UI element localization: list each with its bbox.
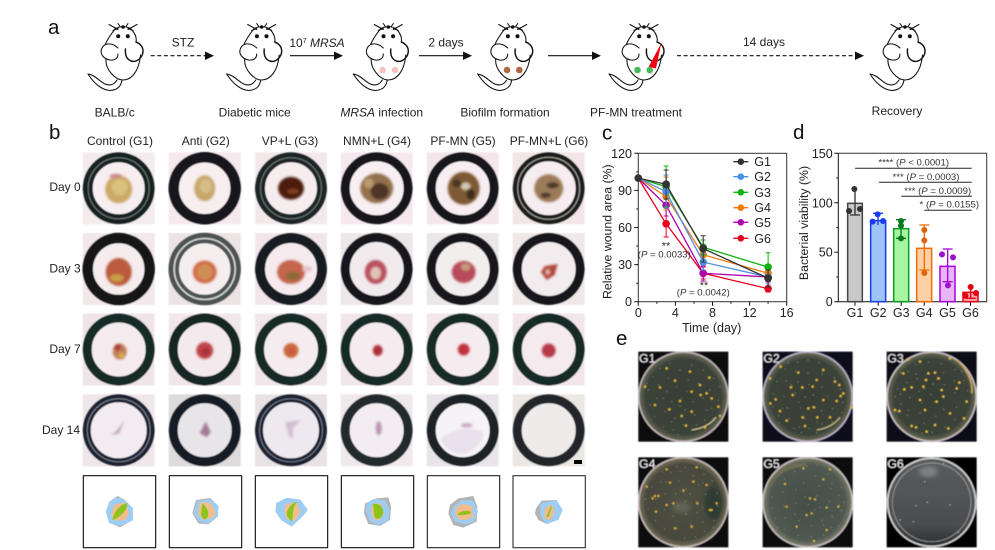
y axis tick labels: 90 [618, 184, 632, 198]
wound map G1 [83, 476, 156, 548]
panel e: bacterial culture plates [616, 327, 979, 550]
legend: G1 [754, 155, 771, 169]
plate G6 [887, 457, 977, 547]
x axis tick labels [635, 306, 794, 320]
plate G2: G2 [763, 351, 780, 365]
x axis tick labels: 0 [635, 306, 642, 320]
column title G4: NMN+L (G4) [343, 134, 411, 148]
y axis tick labels: 150 [812, 147, 833, 161]
arrow: to treatment [548, 52, 601, 60]
series G4 [638, 177, 771, 280]
x axis tick labels: G4 [916, 306, 933, 320]
significance note at day 7: (P = 0.0042) [677, 288, 730, 298]
y axis title: Relative wound area (%) [600, 164, 614, 299]
significance bracket G2 vs G6: *** (P = 0.0003) [893, 172, 959, 183]
photo: G5 day 0 [427, 152, 499, 224]
photo: G1 day 3 [83, 233, 155, 305]
wound map G4 [341, 476, 414, 548]
legend [733, 155, 771, 246]
bar G2 [870, 211, 886, 302]
photo: G5 day 7 [427, 314, 499, 386]
column title G2: Anti (G2) [182, 134, 230, 148]
bar G5 [939, 249, 956, 302]
series G1 [635, 170, 771, 287]
panel b: wound photographs [42, 121, 588, 548]
step label: diabetic mice: Diabetic mice [219, 106, 291, 120]
row label day 0: Day 0 [49, 180, 81, 194]
step label: biofilm formation: Biofilm formation [460, 106, 550, 120]
wound map G5 [427, 476, 500, 548]
y axis tick labels: 60 [618, 221, 632, 235]
photo: G4 day 14 [341, 394, 413, 466]
plate G2 [755, 348, 857, 450]
row label day 14: Day 14 [42, 423, 80, 437]
photo: G2 day 3 [169, 233, 241, 305]
photo: G4 day 3 [341, 233, 413, 305]
bar G4 [917, 225, 932, 302]
arrow: 14 days dashed [677, 52, 864, 60]
panel c: relative wound area line chart [600, 122, 794, 335]
arrow: STZ dashed [151, 52, 214, 60]
panel letter c: c [602, 122, 612, 144]
legend: G6 [754, 232, 771, 246]
photo: G3 day 0 [255, 152, 327, 224]
photo: G6 day 7 [513, 314, 585, 386]
series G5 [638, 178, 771, 282]
legend: G2 [754, 170, 771, 184]
arrow label: STZ: STZ [172, 36, 194, 50]
legend: G4 [754, 201, 771, 215]
bar G6 [962, 284, 979, 302]
photo: G2 day 0 [169, 152, 241, 224]
plate G1: G1 [639, 351, 656, 365]
x axis tick labels [847, 306, 979, 320]
bar chart axes [834, 153, 987, 306]
mouse: recovery [870, 24, 925, 90]
photo: G2 day 7 [169, 314, 241, 386]
series G3 [638, 166, 771, 281]
significance bracket G4 vs G6: * (P = 0.0155) [920, 200, 979, 211]
wound map G3 [255, 476, 328, 548]
panel d: bacterial viability bar chart [793, 121, 987, 320]
photo: G6 day 0 [513, 152, 585, 224]
series G6 [638, 178, 771, 292]
mouse: diabetic [227, 24, 282, 90]
wound map G2 [169, 476, 242, 548]
significance note at day 3: ** [662, 240, 671, 252]
step label: PF-MN treatment: PF-MN treatment [590, 106, 683, 120]
bars and data points in zoom coordinates [846, 186, 979, 302]
plot axes [634, 153, 787, 306]
schematic wound maps G4 to G6 [341, 476, 585, 548]
y axis title: Bacterial viability (%) [797, 166, 811, 280]
column title G3: VP+L (G3) [262, 134, 318, 148]
photo: G5 day 3 [427, 233, 499, 305]
y axis tick labels [611, 147, 632, 309]
arrow label: 10^7 MRSA: 10 [289, 36, 303, 50]
x axis tick labels: G3 [893, 306, 910, 320]
photo: G3 day 3 [255, 233, 327, 305]
y axis tick labels: 120 [611, 147, 632, 161]
plate G5 [760, 454, 859, 550]
photo: G3 day 7 [255, 314, 327, 386]
row label day 7: Day 7 [49, 342, 81, 356]
mouse: PF-MN treatment with green wounds and red light [609, 24, 664, 90]
arrow label: 14 days: 14 days [743, 35, 785, 49]
mouse: biofilm with brown wounds [478, 24, 533, 90]
column title G5: PF-MN (G5) [430, 134, 496, 148]
bar G3 [894, 218, 909, 302]
x axis tick labels: G1 [847, 306, 863, 320]
y axis tick labels [812, 147, 833, 309]
x axis tick labels: 4 [672, 306, 679, 320]
arrow label: 10^7 MRSA: MRSA [307, 36, 345, 50]
y axis tick labels: 0 [625, 295, 632, 309]
photo: G6 day 3 [513, 233, 585, 305]
photo: G1 day 7 [83, 314, 155, 386]
column title G1: Control (G1) [87, 134, 153, 148]
significance note at day 3 [638, 240, 691, 260]
plate G4 [637, 454, 731, 547]
arrow label: 2 days: 2 days [428, 36, 464, 50]
significance bracket G3 vs G6: *** (P = 0.0009) [904, 186, 971, 197]
step label: recovery: Recovery [872, 104, 922, 118]
panel letter e: e [616, 327, 627, 350]
plate G3 [880, 346, 979, 445]
significance note at day 7: ** [700, 280, 709, 292]
legend: G5 [754, 216, 771, 230]
mouse: MRSA infection with pink wounds [353, 24, 408, 90]
photo: G2 day 14 [169, 394, 241, 466]
legend: G3 [754, 186, 771, 200]
photo: G5 day 14 [427, 394, 499, 466]
panel letter b: b [49, 121, 60, 144]
x axis title: Time (day) [682, 321, 741, 335]
series G2 [638, 175, 771, 284]
column title G6: PF-MN+L (G6) [510, 134, 588, 148]
photo: G1 day 14 [83, 394, 155, 466]
step label: MRSA infection: MRSA infection [340, 106, 423, 120]
significance bracket G1 vs G6 [855, 158, 972, 169]
arrow: 2 days [419, 52, 472, 60]
plate G6: G6 [887, 457, 904, 471]
y axis tick labels: 100 [812, 196, 833, 210]
y axis tick labels: 0 [826, 295, 833, 309]
x axis tick labels: 12 [743, 306, 757, 320]
schematic wound maps G1 to G3 [83, 476, 328, 548]
photo: G3 day 14 [255, 394, 327, 466]
panel letter d: d [793, 121, 804, 144]
step label: BALB/c: BALB/c [95, 106, 135, 120]
significance note at day 3: (P = 0.0033) [638, 250, 691, 260]
arrow: MRSA [290, 52, 343, 60]
y axis tick labels: 50 [819, 246, 833, 260]
x axis tick labels: G5 [939, 306, 956, 320]
y axis tick labels: 30 [618, 258, 632, 272]
significance note at day 7 [677, 280, 730, 298]
panel letter a: a [48, 16, 60, 39]
photo: G4 day 7 [341, 314, 413, 386]
wound map G6 [513, 476, 585, 548]
plate G3: G3 [887, 351, 904, 365]
row label day 3: Day 3 [49, 262, 81, 276]
x axis tick labels: 16 [780, 306, 794, 320]
photo: G4 day 0 [341, 152, 413, 224]
significance bracket G1 vs G6: **** (P < 0.0001) [878, 158, 949, 169]
bar G1 [846, 186, 863, 302]
plate G4: G4 [639, 457, 656, 471]
arrow label: 10^7 MRSA: 7 [303, 38, 307, 45]
mouse: BALB/c [88, 24, 143, 90]
plate G5: G5 [763, 457, 780, 471]
x axis tick labels: G6 [962, 306, 979, 320]
scale bar [574, 460, 582, 464]
photo: G1 day 0 [83, 152, 155, 224]
plate G1 [638, 351, 728, 442]
panel a: experimental timeline [48, 16, 925, 120]
photo: G6 day 14 [513, 394, 585, 466]
x axis tick labels: G2 [870, 306, 887, 320]
x axis tick labels: 8 [709, 306, 716, 320]
